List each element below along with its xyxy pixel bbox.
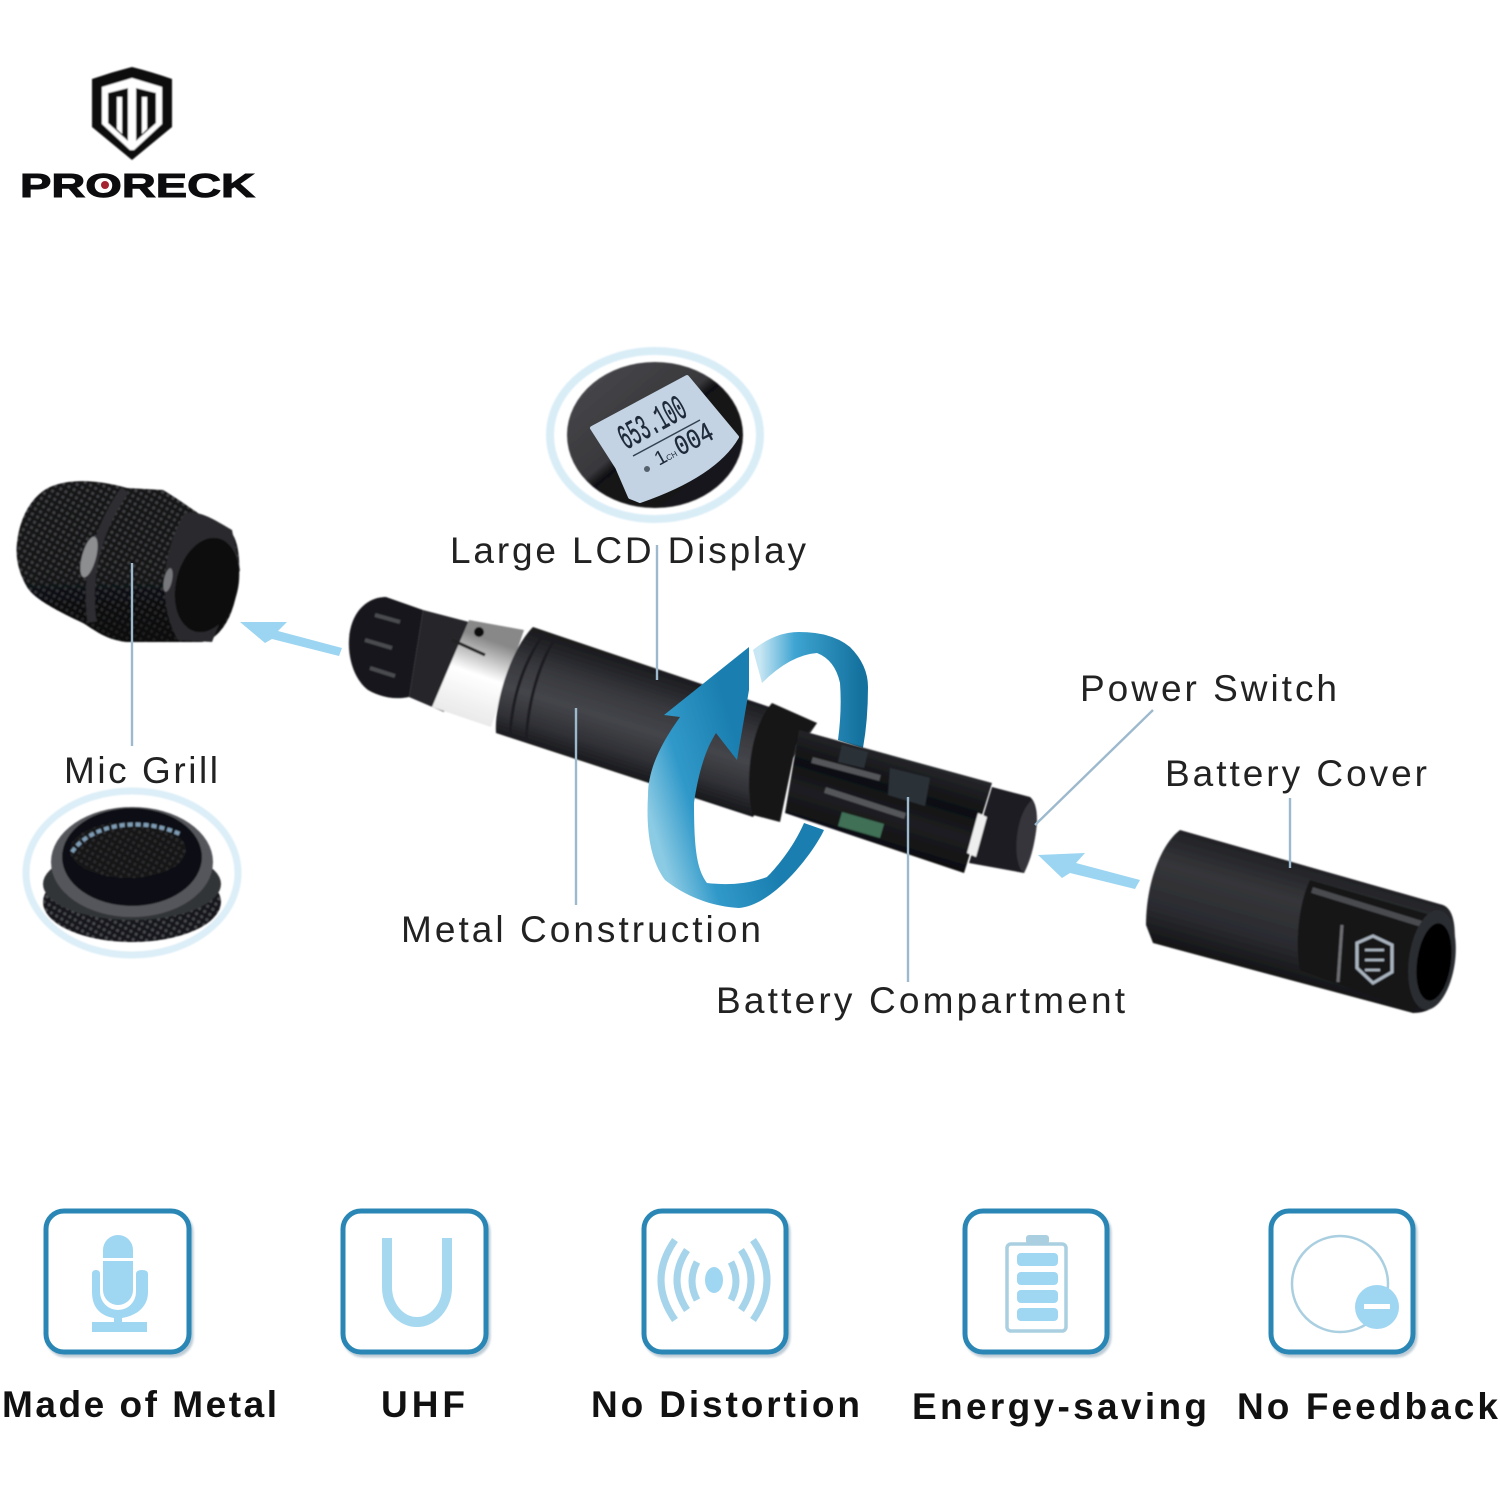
silver section bbox=[432, 620, 524, 727]
rotation ring, back part bbox=[753, 632, 868, 748]
detached mic grill bbox=[17, 481, 249, 642]
battery compartment bbox=[785, 730, 1037, 873]
white label strip bbox=[967, 813, 987, 857]
label: UHF bbox=[381, 1384, 465, 1425]
icon box bbox=[1271, 1211, 1413, 1352]
label: Metal Construction: Metal Construction bbox=[401, 909, 761, 950]
icon: letter U bbox=[387, 1238, 447, 1322]
LCD dot bbox=[644, 466, 650, 472]
leader line: Metal Construction bbox=[575, 708, 577, 905]
icon box bbox=[965, 1211, 1107, 1352]
feature: Made of Metal bbox=[2, 1211, 277, 1425]
end cap bbox=[969, 787, 1037, 873]
LCD readout channel number: 1 bbox=[651, 446, 671, 470]
icon box bbox=[46, 1211, 189, 1352]
icon box bbox=[644, 1211, 786, 1352]
icon: battery bbox=[1007, 1235, 1066, 1331]
cover logo bbox=[1357, 936, 1392, 983]
icon: minus circle bbox=[1292, 1236, 1399, 1332]
logo: Proreck bbox=[20, 67, 255, 204]
icon box bbox=[343, 1211, 486, 1352]
LCD readout channel value: 004 bbox=[670, 418, 720, 464]
barrel collar bbox=[749, 703, 817, 822]
leader line: Mic Grill bbox=[131, 563, 133, 746]
leader line: Battery Cover bbox=[1289, 798, 1291, 868]
LCD divider bbox=[633, 420, 700, 456]
central microphone body bbox=[349, 597, 817, 822]
icon: signal waves bbox=[661, 1240, 767, 1320]
logo red play dot bbox=[101, 181, 109, 189]
logo wordmark: PRORECK bbox=[20, 167, 255, 204]
label: Power Switch: Power Switch bbox=[1080, 668, 1337, 709]
feature: UHF bbox=[343, 1211, 486, 1425]
label: No Distortion bbox=[591, 1384, 860, 1425]
main barrel bbox=[496, 627, 817, 817]
leader line: LCD bbox=[656, 545, 658, 680]
label: Large LCD Display: Large LCD Display bbox=[450, 530, 806, 571]
LCD readout frequency: 653.100 bbox=[611, 389, 694, 460]
icon: microphone bbox=[92, 1235, 148, 1332]
leader line: Power Switch bbox=[1035, 710, 1153, 825]
feature: Energy-saving bbox=[912, 1211, 1207, 1427]
arrow: grill removed bbox=[240, 622, 342, 656]
label: No Feedback bbox=[1237, 1386, 1498, 1427]
feature: No Feedback bbox=[1237, 1211, 1498, 1427]
label: Mic Grill: Mic Grill bbox=[64, 750, 218, 791]
rotation ring arrow bbox=[648, 647, 824, 908]
label: Energy-saving bbox=[912, 1386, 1207, 1427]
cover opening bbox=[1412, 921, 1456, 1003]
leader line: Battery Compartment bbox=[907, 797, 909, 982]
battery cover bbox=[1146, 830, 1462, 1013]
inset: grill close-up bbox=[26, 791, 238, 955]
mic neck bbox=[409, 610, 469, 712]
LCD readout channel tag: CH bbox=[665, 449, 679, 463]
label: Battery Cover: Battery Cover bbox=[1165, 753, 1427, 794]
feature: No Distortion bbox=[591, 1211, 860, 1425]
arrow: battery cover removed bbox=[1038, 853, 1140, 889]
label: Battery Compartment: Battery Compartment bbox=[716, 980, 1126, 1021]
logo shield bbox=[92, 67, 172, 160]
inset: LCD close-up bbox=[550, 351, 760, 519]
label: Made of Metal bbox=[2, 1384, 277, 1425]
cover rim bbox=[1402, 907, 1462, 1013]
mic head ring bbox=[349, 597, 423, 698]
